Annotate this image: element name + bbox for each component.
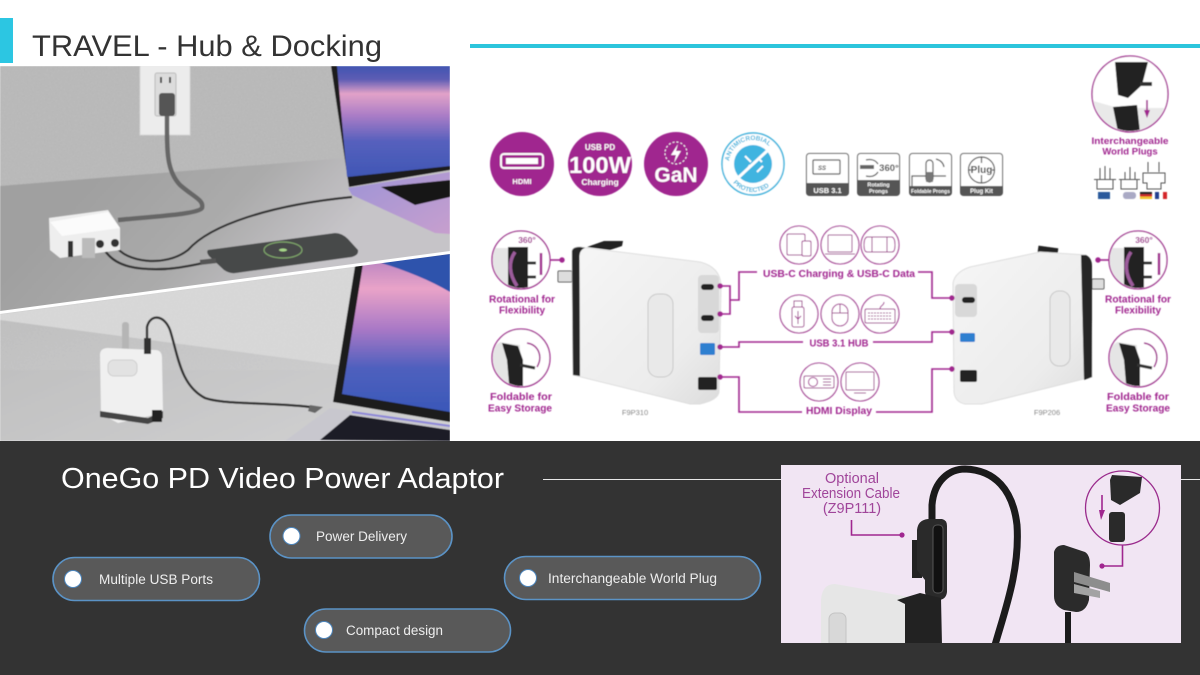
spec icon: rotating prongs: Prongs [869, 189, 888, 195]
upright adapter [100, 322, 163, 424]
badge: HDMI [490, 132, 554, 196]
adapter F9P206 [953, 246, 1104, 417]
left feature: rotational: Rotational for [489, 294, 555, 306]
right feature: foldable: Easy Storage [1106, 404, 1170, 414]
label: USB-C: USB-C Charging & USB-C Data [763, 269, 915, 280]
phone on charger [200, 233, 358, 273]
right feature: rotational: Flexibility [1115, 306, 1161, 316]
feature pill: Compact design: Compact design [346, 623, 443, 638]
right feature: rotational [1095, 231, 1171, 316]
feature pill: Interchangeable World Plug: Interchangeable World Plug [548, 571, 717, 586]
icon: USB stick [780, 295, 818, 333]
panel: optional extension cable [781, 465, 1181, 648]
callout: extension cable label [802, 471, 905, 538]
adapter F9P310 [558, 241, 721, 417]
spec icon: rotating prongs [858, 154, 900, 196]
right feature: foldable: Foldable for [1107, 392, 1169, 403]
icon: monitor [841, 363, 879, 401]
charging cables [116, 197, 352, 261]
cable clip [912, 519, 947, 600]
callout: extension cable label: (Z9P111) [823, 501, 881, 517]
callout: interchangeable world plugs [1090, 56, 1170, 199]
icon: projector [800, 363, 838, 401]
spec icon: USB 3.1: SS [818, 166, 826, 172]
badge: GaN: GaN [654, 164, 698, 187]
world plug outlines [1094, 162, 1165, 189]
right feature: rotational: 360° [1135, 235, 1153, 245]
heading rule [543, 478, 1200, 480]
title: TRAVEL - Hub & Docking [32, 30, 382, 63]
USB-C cable [147, 318, 310, 407]
badge: USB PD 100W: USB PD [585, 143, 615, 152]
spec icon: rotating prongs: 360° [879, 163, 899, 174]
icon: mouse [821, 295, 859, 333]
icon: laptop [821, 226, 859, 264]
connector lines: USB-C [717, 272, 955, 317]
badge: antimicrobial protected [720, 131, 786, 197]
label: HDMI display: HDMI Display [806, 406, 872, 417]
badge: HDMI: HDMI [512, 177, 532, 186]
feature pill: Multiple USB Ports: Multiple USB Ports [99, 572, 213, 587]
adapter body [821, 584, 942, 648]
feature pill: Multiple USB Ports [53, 558, 260, 600]
left feature: foldable: Easy Storage [488, 404, 552, 414]
badge: USB PD 100W: Charging [581, 177, 619, 187]
spec icon: USB 3.1: USB 3.1 [813, 186, 842, 195]
left feature: rotational: 360° [518, 235, 536, 245]
connector lines: USB hub [717, 329, 955, 350]
spec icon: foldable prongs: Foldable Prongs [911, 189, 950, 195]
icon: keyboard [861, 295, 899, 333]
photo: adapter on desk with laptop and phone [0, 60, 450, 320]
callout: swap plug inset [1086, 471, 1160, 569]
right feature: rotational: Rotational for [1105, 294, 1171, 306]
spec icon: plug kit: Plug [971, 165, 992, 176]
country flags [1098, 192, 1167, 199]
left feature: rotational [489, 231, 565, 316]
feature pill: Interchangeable World Plug [504, 556, 760, 600]
spec icon: plug kit: Plug Kit [970, 189, 993, 195]
label: USB hub: USB 3.1 HUB [810, 338, 868, 350]
power cord [118, 116, 202, 220]
spec icon: foldable prongs [910, 154, 952, 196]
adapter F9P206: F9P206 [1034, 408, 1060, 417]
badge: GaN [644, 132, 708, 196]
badge: USB PD 100W [568, 132, 632, 196]
feature pill: Compact design [304, 609, 510, 652]
panel: product specifications [488, 54, 1172, 417]
flat extension cable [932, 469, 1017, 645]
callout: extension cable label: Extension Cable [802, 486, 900, 502]
badge: antimicrobial protected: PROTECTED [733, 180, 769, 193]
callout: interchangeable world plugs: World Plugs [1102, 146, 1158, 158]
connector lines: HDMI [717, 366, 955, 412]
left feature: foldable [488, 329, 552, 414]
laptop [319, 254, 450, 441]
top accent rule [470, 44, 1200, 48]
US plug head [1054, 545, 1110, 646]
spec icon: USB 3.1 [806, 154, 848, 196]
left feature: foldable: Foldable for [490, 392, 552, 403]
badge: USB PD 100W: 100W [569, 152, 631, 178]
adapter F9P310: F9P310 [622, 408, 648, 417]
right feature: foldable [1106, 329, 1170, 414]
badge: antimicrobial protected: ANTIMICROBIAL [724, 134, 770, 162]
callout: interchangeable world plugs: Interchangeable [1092, 136, 1168, 147]
feature pill: Power Delivery: Power Delivery [316, 529, 407, 544]
photo: upright adapter connected to laptop [0, 250, 450, 441]
icon: tablet and phone [780, 226, 818, 264]
product name heading: OneGo PD Video Power Adaptor [61, 463, 504, 495]
left feature: rotational: Flexibility [499, 306, 545, 316]
wall outlet [140, 60, 190, 135]
white adapter on desk [49, 210, 120, 258]
feature pill: Power Delivery [270, 515, 452, 558]
dark bottom band [0, 441, 1200, 675]
spec icon: rotating prongs: Rotating [867, 182, 890, 188]
spec icon: plug kit [960, 154, 1002, 196]
title accent bar [0, 18, 13, 63]
icon: handheld console [861, 226, 899, 264]
laptop [331, 66, 450, 234]
callout: extension cable label: Optional [825, 471, 879, 487]
